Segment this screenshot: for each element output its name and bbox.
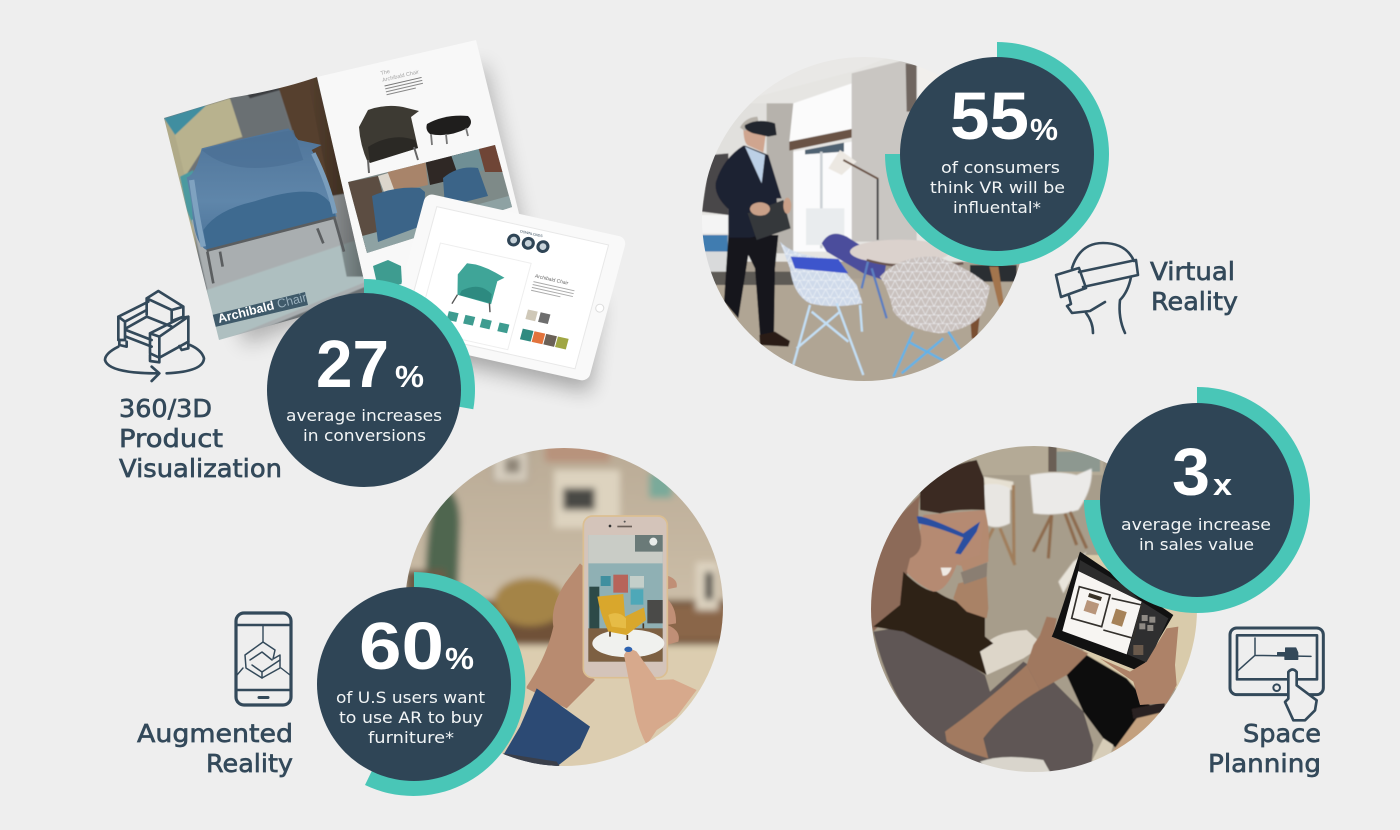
left screen and shelf [702,153,728,215]
dark chair product [359,106,419,173]
icon: rotating 3D armchair [105,291,204,381]
pouf [494,578,566,626]
stat number: 55 [950,79,1029,154]
floor [745,261,1020,280]
magazine page title [380,62,424,95]
orange accent [409,256,415,266]
label: Augmented Reality [137,719,293,778]
stat caption: to use AR to buy [339,708,483,727]
label: 360/3D Product Visualization: Product [119,424,223,453]
stat number [1172,435,1233,510]
tablet home button [595,303,605,313]
stat caption: of U.S users want [336,688,485,707]
label: Augmented Reality: Reality [206,749,293,778]
ottoman [426,116,471,145]
teal progress arc [365,572,525,796]
label: Space Planning: Space [1243,719,1321,748]
denim sleeve [503,688,590,767]
stat number: 3 [1172,435,1210,510]
tablet with floor plan [1052,552,1178,705]
face [907,510,985,592]
stat number: x [1213,467,1233,502]
forearm and left hand [945,665,1040,758]
stat caption [286,406,442,445]
phone with AR app [583,516,667,678]
label: Space Planning: Planning [1208,749,1321,778]
download icons: DOWNLOADS [520,229,544,238]
stat: 3x sales value [1084,387,1310,613]
stat caption: think VR will be [930,178,1065,197]
stat number: % [445,641,474,676]
man in suit [716,117,791,347]
floor lamp [828,150,857,175]
magazine page title: Archibald Chair [382,69,420,84]
teal progress arc [1084,387,1310,613]
yellow armchair [597,594,646,635]
download icons [506,227,552,254]
image: augmented reality scene [400,440,730,775]
magazine caption: Archibald Chair [216,290,308,326]
hand behind phone [527,563,679,708]
stat number: 60 [359,609,444,684]
wireframe chair left [780,242,863,375]
product viewer card [417,243,531,350]
teal chair thumbnail [373,260,402,288]
product info [518,273,583,349]
teal progress arc [885,42,1109,266]
image: tablet configurator [387,193,627,392]
right hand over tablet [1100,627,1178,705]
magazine page title: The [380,69,391,77]
label: Virtual Reality: Virtual [1150,257,1235,286]
label: Virtual Reality [1150,257,1238,316]
stat number: 27 [316,327,389,402]
dark trousers [1067,655,1150,748]
label: 360/3D Product Visualization: Visualization [119,454,282,483]
hair top [920,460,985,513]
label: Space Planning [1208,719,1321,778]
room walls and columns [700,55,890,105]
stat caption: of consumers [941,158,1060,177]
stat caption: influental* [953,198,1041,217]
back chair [822,234,887,280]
image: space planning scene [867,442,1203,778]
icon: touch tablet with floor plan [1230,628,1323,720]
blue glasses [917,516,980,554]
wall frames [493,450,528,482]
blue armchair [187,128,344,283]
stat number [359,609,474,684]
tablet body [387,193,627,382]
stat caption: furniture* [368,728,454,747]
white chairs background [983,468,1092,593]
wireframe chair right [880,257,990,377]
stat number [950,79,1058,154]
stat caption: in sales value [1139,535,1254,554]
raised hand and bracelet [960,510,989,572]
tablet screen [403,207,609,369]
label: 360/3D Product Visualization: 360/3D [119,394,212,423]
stat caption: average increase [1121,515,1271,534]
label: 360/3D Product Visualization [119,394,282,483]
stat number: % [395,359,424,394]
icon: VR headset on head [1056,243,1138,333]
stat caption: in conversions [303,426,426,445]
plant [425,485,460,590]
cream sofa [980,630,1043,675]
stat: 27 percent conversions [267,279,475,487]
side person [870,495,926,632]
stat caption [336,688,485,747]
teal progress arc [364,279,475,409]
image: virtual reality scene [697,52,1033,388]
blue chair in strip [372,188,425,242]
label: Virtual Reality: Reality [1151,287,1238,316]
icon: phone with AR chair [236,613,291,705]
stat caption: average increases [286,406,442,425]
product info: Archibald Chair [534,273,569,287]
magazine left page photo [164,77,364,340]
stat number [316,327,424,402]
dining table [970,265,1017,282]
bottom sofa [980,756,1050,772]
magazine right page [317,40,530,298]
pointing hand [624,647,697,745]
label: Augmented Reality: Augmented [137,719,293,748]
image: catalogue magazine [160,40,530,350]
sweater [873,627,1093,778]
stat number: % [1030,112,1058,147]
lifestyle photo strip [348,145,512,253]
stat caption [930,158,1065,217]
stat caption [1121,515,1271,554]
forearm right [1112,712,1160,752]
stat: 55 percent virtual reality [885,42,1109,266]
stat: 60 percent augmented reality [317,572,525,796]
long hair [873,572,993,675]
